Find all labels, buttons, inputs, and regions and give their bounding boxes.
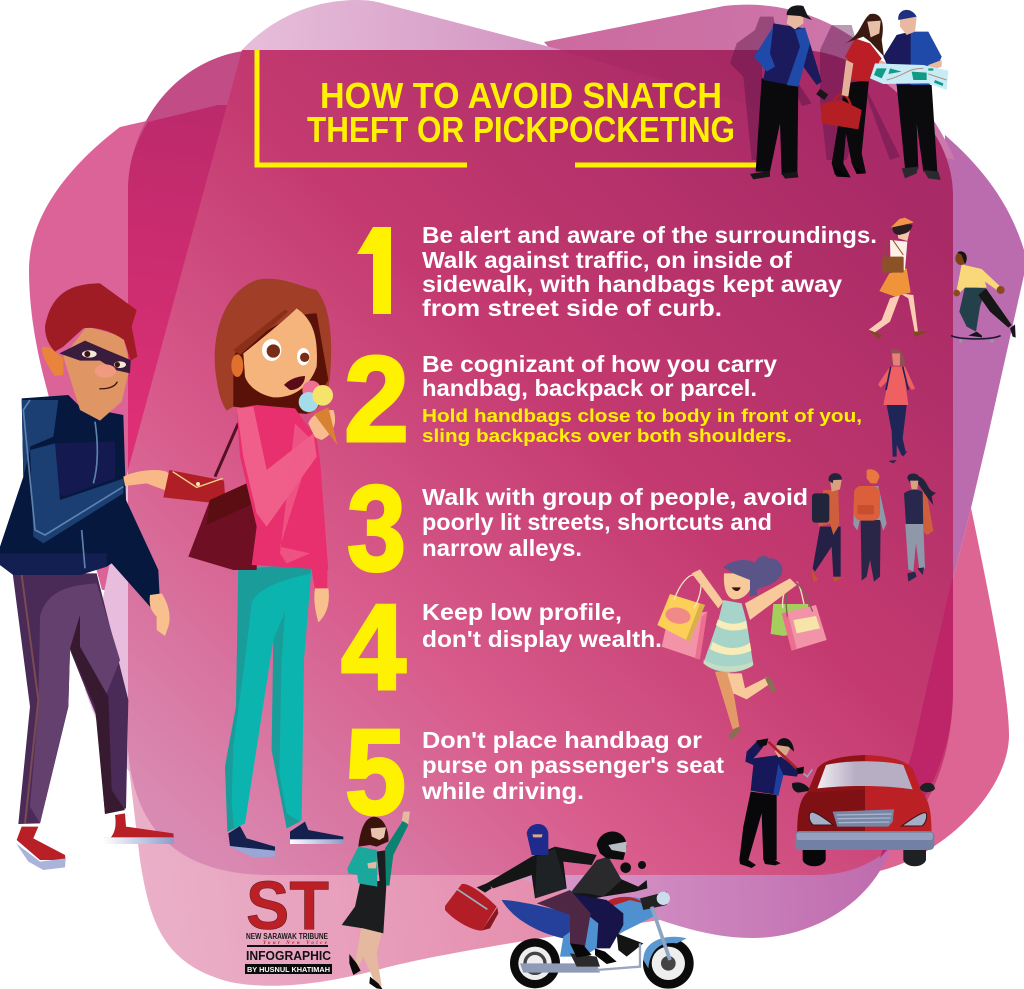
thief jacket, head and hand	[0, 283, 225, 607]
tip 1 text: from street side of curb.	[422, 295, 722, 321]
tip 2 highlighted text: sling backpacks over both shoulders.	[422, 426, 792, 446]
tip 3 text: narrow alleys.	[422, 535, 582, 561]
illustration: thief	[0, 283, 225, 870]
illustration: happy shopper (tip 4)	[657, 556, 827, 741]
tip 1 text: sidewalk, with handbags kept away	[422, 271, 842, 297]
logo: ST New Sarawak Tribune	[245, 867, 332, 974]
tip 4 text: don't display wealth.	[422, 626, 662, 652]
logo: ST New Sarawak Tribune: Your New Voice	[263, 941, 328, 946]
logo: ST New Sarawak Tribune: BY HUSNUL KHATIMAH	[247, 965, 330, 974]
illustration: group of tourists with map	[730, 5, 948, 180]
title	[307, 75, 735, 150]
tip 5 text	[421, 727, 724, 804]
illustration: woman walking (tip 1)	[867, 218, 929, 338]
numbers: 1	[375, 232, 389, 332]
tip 2 text: handbag, backpack or parcel.	[422, 375, 757, 401]
illustration: three walkers (tip 3)	[811, 469, 936, 582]
tip 1 text: Be alert and aware of the surroundings.	[422, 222, 877, 248]
illustration: woman with backpack (tip 2)	[878, 349, 915, 463]
main panel	[128, 50, 953, 875]
numbers: 3	[347, 460, 406, 596]
tip 4 text	[422, 599, 662, 652]
tip 2 text: Be cognizant of how you carry	[422, 351, 777, 377]
numbers	[341, 227, 409, 840]
thief trousers and shoes	[13, 573, 174, 870]
tip 5 text: Don't place handbag or	[422, 727, 702, 753]
tip 1 text	[422, 222, 877, 321]
thief lower hand	[150, 593, 170, 636]
logo: ST New Sarawak Tribune: NEW SARAWAK TRIBUNE	[246, 932, 329, 941]
logo: ST New Sarawak Tribune: INFOGRAPHIC	[246, 949, 331, 963]
numbers: 4	[341, 579, 406, 715]
woman legs and shoes	[225, 560, 343, 857]
tip 5 text: while driving.	[421, 778, 584, 804]
tip 5 text: purse on passenger's seat	[422, 752, 724, 778]
numbers: 5	[345, 704, 406, 840]
tip 4 text: Keep low profile,	[422, 599, 622, 625]
tip 3 text: poorly lit streets, shortcuts and	[422, 509, 772, 535]
tip 1 text: Walk against traffic, on inside of	[422, 247, 792, 273]
illustration: woman waving	[342, 812, 410, 989]
logo: ST New Sarawak Tribune: ST	[246, 867, 329, 944]
tip 2 highlighted text: Hold handbags close to body in front of you,	[422, 406, 862, 426]
title bracket	[257, 50, 760, 165]
title: HOW TO AVOID SNATCH	[320, 75, 722, 116]
woman hair, face, torso, bag	[188, 279, 337, 570]
tip 3 text: Walk with group of people, avoid	[422, 484, 808, 510]
tip 3 text	[422, 484, 808, 561]
illustration: woman with ice cream	[188, 279, 343, 857]
illustration: thief breaking into car (tip 5)	[739, 738, 935, 868]
numbers: 2	[344, 331, 409, 467]
illustration: skateboarder (tip 1)	[951, 251, 1016, 343]
tip 2 highlighted text	[422, 406, 862, 446]
tip 2 text	[422, 351, 777, 401]
title: THEFT OR PICKPOCKETING	[307, 109, 735, 150]
illustration: motorbike snatch thieves	[445, 824, 694, 989]
